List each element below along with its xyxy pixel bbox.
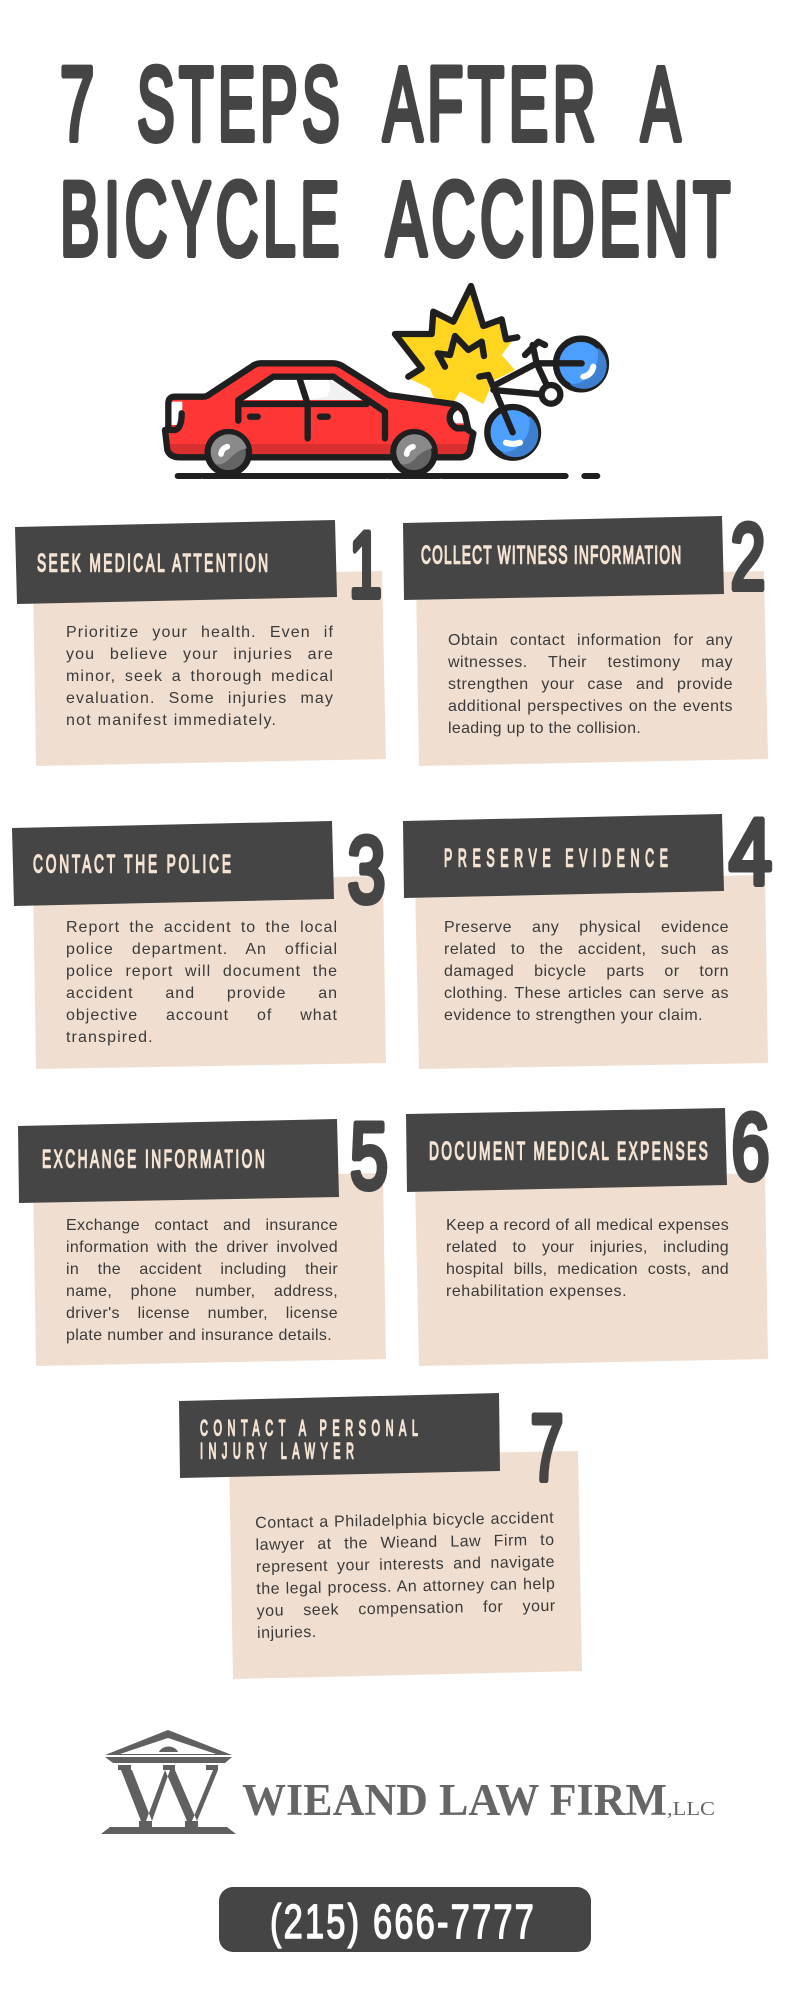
heading: step 7: INJURY LAWYER	[200, 1438, 354, 1464]
heading: step 2: COLLECT WITNESS INFORMATION	[421, 542, 681, 570]
number 1: 1	[349, 512, 382, 617]
body text: step 3: accident and provide an	[66, 985, 338, 1002]
icon: impact burst	[395, 286, 517, 404]
road	[178, 467, 597, 485]
heading: step 7	[200, 1415, 418, 1464]
body text: step 4: clothing. These articles can serve as	[444, 985, 729, 1002]
body text: step 5: information with the driver involved	[66, 1239, 338, 1256]
body text: step 7: lawyer at the Wieand Law Firm to	[255, 1532, 555, 1554]
firm name: WIEAND LAW FIRM	[242, 1775, 667, 1825]
body text: step 3: transpired.	[66, 1029, 154, 1046]
title	[60, 46, 735, 278]
body text: step 1: minor, seek a thorough medical	[66, 668, 334, 685]
body text: step 1: Prioritize your health. Even if	[66, 624, 334, 641]
title: STEPS	[137, 46, 344, 163]
body text: step 4: damaged bicycle parts or torn	[444, 963, 729, 980]
body text: step 5: Exchange contact and insurance	[66, 1217, 338, 1234]
body text: step 5: driver's license number, license	[66, 1305, 338, 1322]
panel: step 3	[12, 817, 386, 1069]
body text: step 3	[66, 917, 338, 1051]
firm name: ,LLC	[667, 1798, 715, 1820]
body text: step 3: Report the accident to the local	[66, 919, 338, 936]
body text: step 3: police report will document the	[66, 963, 338, 980]
body text: step 1: you believe your injuries are	[66, 646, 334, 663]
icon: red car	[165, 363, 473, 480]
panel: step 2	[403, 504, 768, 766]
phone number: (215) 666-7777	[270, 1896, 536, 1949]
number 5: 5	[350, 1103, 388, 1208]
body text: step 2: Obtain contact information for any	[448, 632, 733, 649]
phone pill	[219, 1887, 591, 1952]
heading: step 6: DOCUMENT MEDICAL EXPENSES	[429, 1138, 708, 1166]
body text: step 7	[255, 1508, 556, 1647]
body text: step 7: you seek compensation for your	[257, 1598, 556, 1620]
panel: step 6	[406, 1094, 770, 1366]
heading: step 4: PRESERVE EVIDENCE	[444, 845, 668, 873]
body text: step 5: name, phone number, address,	[66, 1283, 338, 1300]
body text: step 1: not manifest immediately.	[66, 712, 277, 729]
heading: step 1: SEEK MEDICAL ATTENTION	[37, 550, 268, 578]
body text: step 2: strengthen your case and provide	[448, 676, 733, 693]
body text: step 6: Keep a record of all medical expenses	[446, 1217, 729, 1234]
body text: step 7: the legal process. An attorney can help	[256, 1576, 555, 1598]
body text: step 6: rehabilitation expenses.	[446, 1283, 627, 1300]
body text: step 7: represent your interests and navigate	[256, 1554, 555, 1576]
body text: step 2: additional perspectives on the events	[448, 698, 733, 715]
body text: step 4	[444, 917, 729, 1029]
heading: step 7: CONTACT A PERSONAL	[200, 1415, 418, 1441]
illustration: car hitting bicycle	[165, 286, 607, 480]
body text: step 6: hospital bills, medication costs, and	[446, 1261, 729, 1278]
body text: step 2: witnesses. Their testimony may	[448, 654, 733, 671]
body text: step 4: evidence to strengthen your claim.	[444, 1007, 703, 1024]
body text: step 4: related to the accident, such as	[444, 941, 729, 958]
number 7: 7	[530, 1395, 564, 1500]
body text: step 6: related to your injuries, including	[446, 1239, 729, 1256]
body text: step 2: leading up to the collision.	[448, 720, 641, 737]
heading: step 3: CONTACT THE POLICE	[33, 851, 231, 879]
title: AFTER	[383, 46, 600, 163]
title: 7	[60, 46, 99, 163]
icon: temple W	[101, 1730, 236, 1834]
body text: step 2	[448, 630, 733, 742]
body text: step 1	[66, 622, 334, 734]
body text: step 5: in the accident including their	[66, 1261, 338, 1278]
panel: step 5	[18, 1103, 388, 1366]
number 2: 2	[730, 504, 766, 609]
body text: step 7: injuries.	[257, 1624, 317, 1642]
heading: step 5: EXCHANGE INFORMATION	[42, 1146, 265, 1174]
title: A	[641, 46, 685, 163]
body text: step 7: Contact a Philadelphia bicycle accident	[255, 1510, 554, 1532]
number 4: 4	[729, 799, 772, 904]
number 6: 6	[732, 1094, 770, 1199]
body text: step 4: Preserve any physical evidence	[444, 919, 729, 936]
body text: step 3: police department. An official	[66, 941, 338, 958]
panel: step 1	[15, 512, 386, 766]
logo: Wieand Law Firm	[101, 1730, 715, 1834]
body text: step 6	[446, 1215, 729, 1305]
body text: step 1: evaluation. Some injuries may	[66, 690, 334, 707]
body text: step 5: plate number and insurance details.	[66, 1327, 332, 1344]
icon: bicycle	[479, 339, 607, 458]
number 3: 3	[348, 817, 386, 922]
title: BICYCLE	[60, 161, 344, 278]
body text: step 5	[66, 1215, 338, 1349]
panel: step 7	[179, 1393, 582, 1679]
panel: step 4	[403, 799, 772, 1069]
body text: step 3: objective account of what	[66, 1007, 338, 1024]
